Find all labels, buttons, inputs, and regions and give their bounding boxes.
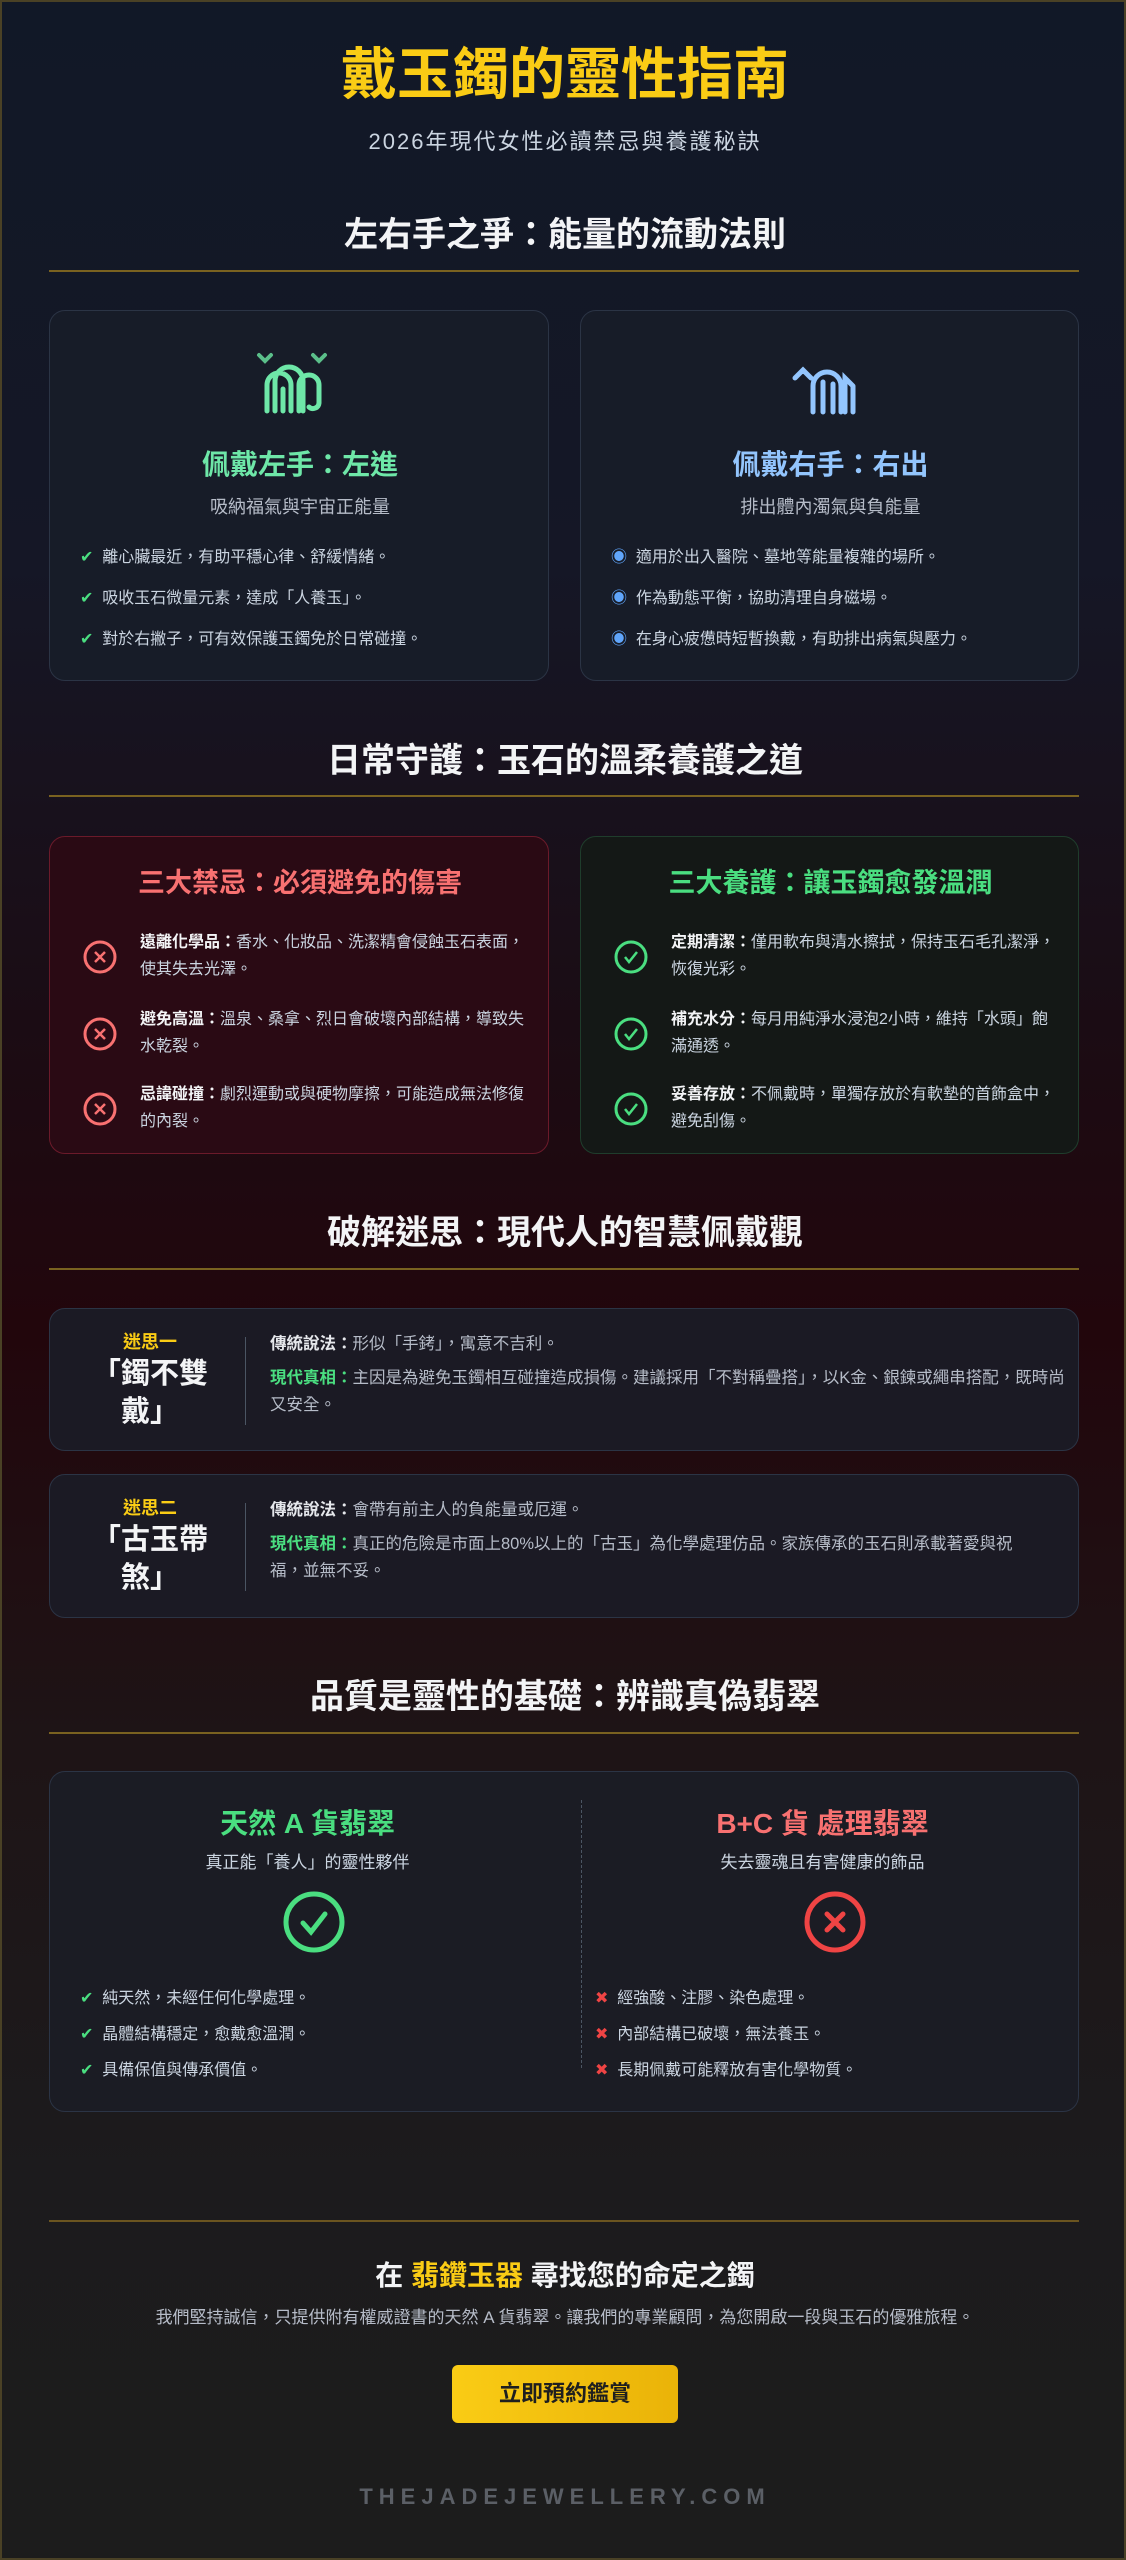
panel title: 三大養護：讓玉鐲愈發溫潤 — [668, 868, 992, 898]
title: 戴玉鐲的靈性指南 — [341, 43, 789, 106]
bullets: ✔ 吸收玉石微量元素，達成「人養玉」。 — [80, 590, 366, 607]
item 3: 忌諱碰撞：劇烈運動或與硬物摩擦，可能造成無法修復的內裂。 — [140, 1086, 524, 1130]
myth text: 傳統說法：形似「手銬」，寓意不吉利。 — [270, 1335, 559, 1353]
bullets: ◉ 在身心疲憊時短暫換戴，有助排出病氣與壓力。 — [611, 631, 972, 648]
column: B+C jade — [595, 1808, 929, 2079]
icon: check circle — [284, 1892, 344, 1952]
myth label: 迷思二 — [123, 1498, 177, 1518]
subtitle: 2026年現代女性必讀禁忌與養護秘訣 — [369, 129, 761, 154]
item 1: 遠離化學品：香水、化妝品、洗潔精會侵蝕玉石表面，使其失去光澤。 — [140, 934, 524, 978]
bullets: ✔ 離心臟最近，有助平穩心律、舒緩情緒。 — [80, 549, 390, 566]
myth label: 「鐲不雙 — [92, 1358, 208, 1390]
button: 立即預約鑑賞 — [499, 2381, 631, 2406]
item 2: 避免高溫：溫泉、桑拿、烈日會破壞內部結構，導致失水乾裂。 — [140, 1011, 524, 1055]
card subtitle: 吸納福氣與宇宙正能量 — [210, 497, 390, 517]
bullets — [80, 548, 422, 648]
column: B+C jade: ✖ 經強酸、注膠、染色處理。 — [595, 1990, 809, 2007]
bullets: ◉ 適用於出入醫院、墓地等能量複雜的場所。 — [611, 549, 940, 566]
panel: care — [580, 836, 1079, 1154]
column: A jade: ✔ 純天然，未經任何化學處理。 — [80, 1990, 310, 2007]
bullets — [611, 548, 972, 648]
card subtitle: 排出體內濁氣與負能量 — [740, 497, 920, 517]
myth text — [270, 1334, 1065, 1414]
bullets: ◉ 作為動態平衡，協助清理自身磁場。 — [611, 590, 892, 607]
heading: quality: 品質是靈性的基礎：辨識真偽翡翠 — [310, 1678, 820, 1716]
column: B+C jade: B+C 貨 處理翡翠 — [716, 1808, 929, 1839]
myth text: 現代真相：真正的危險是市面上80%以上的「古玉」為化學處理仿品。家族傳承的玉石則承載著愛與祝福，並無不妥。 — [270, 1535, 1013, 1580]
icon: x circle — [804, 1892, 866, 1952]
column: B+C jade: ✖ 長期佩戴可能釋放有害化學物質。 — [595, 2062, 857, 2079]
heading: daily care: 日常守護：玉石的溫柔養護之道 — [327, 742, 803, 780]
myth text: 現代真相：主因是為避免玉鐲相互碰撞造成損傷。建議採用「不對稱疊搭」，以K金、銀鍊或繩串搭配，既時尚又安全。 — [270, 1369, 1065, 1414]
card title: 佩戴右手：右出 — [732, 449, 928, 480]
heading: myths: 破解迷思：現代人的智慧佩戴觀 — [327, 1214, 803, 1252]
footer: THEJADEJEWELLERY.COM — [359, 2484, 771, 2509]
myth text: 傳統說法：會帶有前主人的負能量或厄運。 — [270, 1501, 584, 1519]
panel: right hand — [580, 310, 1079, 681]
myth card 2 — [49, 1474, 1079, 1618]
myth label: 迷思一 — [123, 1332, 177, 1352]
panel title: 三大禁忌：必須避免的傷害 — [138, 868, 462, 898]
myth label — [92, 1332, 208, 1428]
panel: left hand — [49, 310, 549, 681]
item 3: 妥善存放：不佩戴時，單獨存放於有軟墊的首飾盒中，避免刮傷。 — [671, 1086, 1055, 1130]
myth text — [270, 1500, 1013, 1580]
item 1: 定期清潔：僅用軟布與清水擦拭，保持玉石毛孔潔淨，恢復光彩。 — [671, 934, 1055, 978]
column: A jade: 天然 A 貨翡翠 — [220, 1808, 395, 1839]
icon: green hand — [256, 352, 328, 414]
myth label: 戴」 — [121, 1396, 179, 1428]
CTA heading: 在 翡鑽玉器 尋找您的命定之鐲 — [375, 2260, 755, 2291]
CTA text: 我們堅持誠信，只提供附有權威證書的天然 A 貨翡翠。讓我們的專業顧問，為您開啟一段與玉石的優雅旅程。 — [156, 2308, 974, 2327]
column: A jade: ✔ 晶體結構穩定，愈戴愈溫潤。 — [80, 2026, 310, 2043]
panel: comparison — [49, 1771, 1079, 2112]
myth card 1 — [49, 1308, 1079, 1451]
myth label: 「古玉帶 — [92, 1524, 208, 1556]
column: A jade: ✔ 具備保值與傳承價值。 — [80, 2062, 262, 2079]
column: B+C jade: 失去靈魂且有害健康的飾品 — [720, 1853, 924, 1872]
icon: blue hand — [792, 366, 856, 414]
panel: taboos — [49, 836, 549, 1154]
column: B+C jade: ✖ 內部結構已破壞，無法養玉。 — [595, 2026, 825, 2043]
heading: left right hands: 左右手之爭：能量的流動法則 — [344, 216, 786, 254]
button — [452, 2365, 678, 2423]
bullets: ✔ 對於右撇子，可有效保護玉鐲免於日常碰撞。 — [80, 631, 422, 648]
myth label — [92, 1498, 208, 1594]
card title: 佩戴左手：左進 — [202, 449, 398, 480]
item 2: 補充水分：每月用純淨水浸泡2小時，維持「水頭」飽滿通透。 — [671, 1011, 1048, 1055]
column: A jade: 真正能「養人」的靈性夥伴 — [206, 1853, 410, 1872]
column: A jade — [80, 1808, 410, 2079]
myth label: 煞」 — [121, 1562, 179, 1594]
